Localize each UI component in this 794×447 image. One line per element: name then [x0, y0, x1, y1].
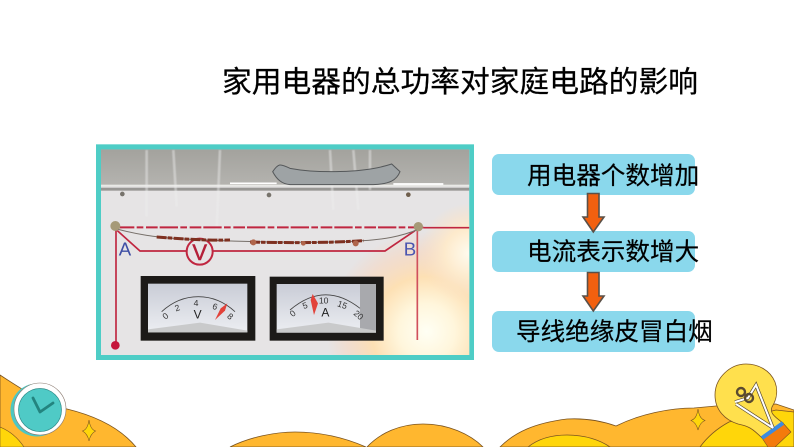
- voltmeter: 0: [160, 311, 171, 321]
- voltmeter: [141, 276, 255, 341]
- circuit lines: [116, 227, 469, 344]
- label B: B: [404, 239, 416, 260]
- flow box 1: 用电器个数增加: [527, 162, 699, 190]
- ammeter: [270, 277, 384, 341]
- voltmeter: 2: [173, 302, 181, 313]
- ammeter: A: [321, 306, 329, 320]
- icon: left sparkle: [82, 420, 96, 441]
- voltmeter: 8: [225, 311, 235, 322]
- icon: light bulb: [715, 364, 791, 447]
- burning wire: [118, 229, 417, 246]
- label A: A: [119, 239, 132, 260]
- ammeter: 10: [319, 295, 329, 305]
- terminal A: [110, 221, 120, 231]
- flow box 1: [492, 154, 699, 195]
- icon: clock: [10, 383, 66, 436]
- arrow: box 2 to box 3: [583, 272, 604, 311]
- wall: [101, 149, 469, 355]
- arrow: box 1 to box 2: [583, 194, 604, 232]
- glass dish: [273, 164, 400, 185]
- decoration: bottom-right hills: [230, 404, 794, 447]
- voltmeter: 6: [211, 301, 219, 312]
- panel: experiment photo: [96, 144, 474, 360]
- ammeter: 20: [352, 308, 366, 322]
- voltmeter: 4: [194, 298, 199, 308]
- flow box 3: [492, 311, 713, 352]
- title: 家用电器的总功率对家庭电路的影响: [222, 66, 698, 99]
- flow box 2: 电流表示数增大: [527, 238, 699, 266]
- ammeter: 5: [301, 300, 309, 311]
- voltmeter: V: [194, 307, 202, 321]
- decoration: bottom-left hill: [0, 375, 136, 447]
- ammeter: 0: [288, 308, 298, 319]
- glow: [335, 239, 470, 355]
- terminal dot: [111, 341, 120, 350]
- flow box 3: 导线绝缘皮冒白烟: [516, 318, 713, 346]
- ammeter: 15: [336, 298, 349, 311]
- icon: right sparkle: [691, 409, 705, 430]
- photo frame: [96, 144, 474, 360]
- voltmeter symbol label: V: [192, 240, 207, 265]
- terminal B: [414, 222, 423, 231]
- flow box 2: [492, 231, 699, 272]
